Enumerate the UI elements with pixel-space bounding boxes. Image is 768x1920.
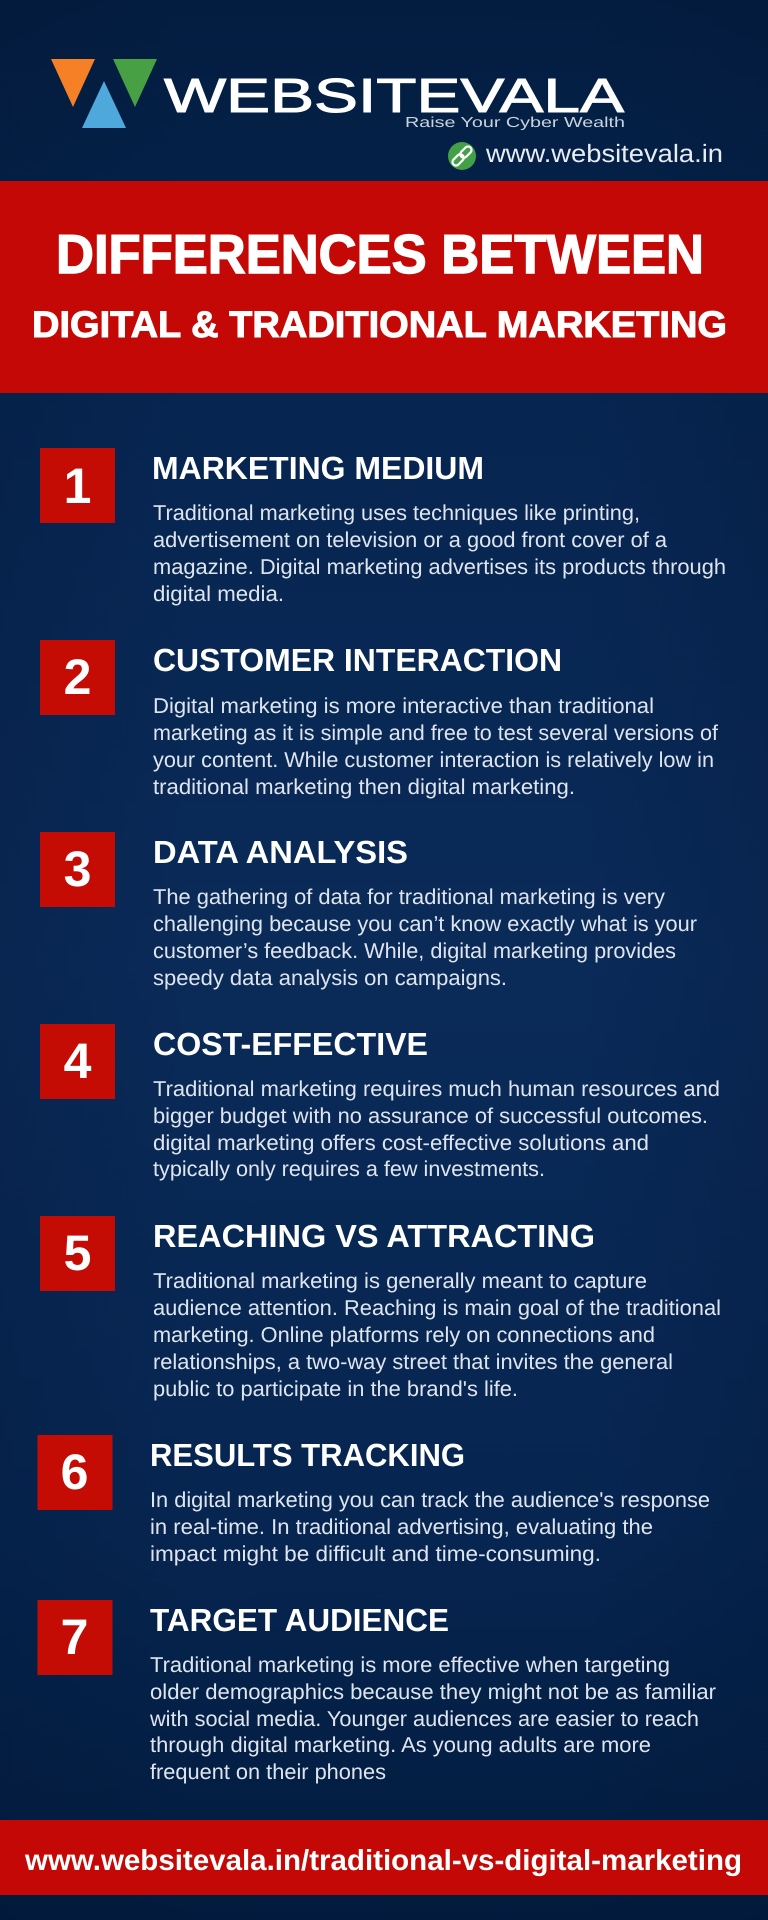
logo wordmark: WEBSITEVALA — [164, 70, 624, 123]
heading 4: COST-EFFECTIVE — [153, 1026, 428, 1062]
body text 7: with social media. Younger audiences are easier to reach — [149, 1707, 699, 1731]
number badge 7 — [38, 1600, 112, 1675]
body text 4: digital marketing offers cost-effective solutions and — [153, 1131, 649, 1155]
number badge 4 — [40, 1024, 115, 1099]
footer banner — [0, 1820, 768, 1895]
body text 6: in real-time. In traditional advertising, evaluating the — [150, 1515, 653, 1539]
website link — [448, 140, 723, 170]
panel: item 4 cost-effective — [40, 1024, 720, 1181]
body text 5: relationships, a two-way street that invites the general — [153, 1350, 673, 1374]
body text 1 — [153, 501, 726, 606]
number badge 4: 4 — [64, 1033, 92, 1089]
body text 3 — [153, 885, 697, 990]
body text 7: through digital marketing. As young adults are more — [150, 1733, 651, 1757]
body text 2: traditional marketing then digital marketing. — [153, 775, 575, 799]
body text 3: customer’s feedback. While, digital marketing provides — [153, 939, 676, 963]
number badge 7: 7 — [61, 1609, 88, 1665]
title banner — [0, 181, 768, 393]
body text 7: Traditional marketing is more effective when targeting — [150, 1653, 670, 1677]
body text 5: public to participate in the brand's life. — [153, 1377, 518, 1401]
panel: item 5 reaching vs attracting — [40, 1216, 721, 1401]
panel: item 2 customer interaction — [40, 640, 718, 799]
heading 3: DATA ANALYSIS — [153, 834, 408, 870]
body text 5: marketing. Online platforms rely on connections and — [153, 1323, 655, 1347]
body text 3: The gathering of data for traditional marketing is very — [153, 885, 665, 909]
body text 1: Traditional marketing uses techniques like printing, — [153, 501, 640, 525]
logo tagline: Raise Your Cyber Wealth — [405, 115, 625, 131]
number badge 6 — [38, 1435, 112, 1510]
subtitle: DIGITAL & TRADITIONAL MARKETING — [32, 304, 727, 345]
number badge 1 — [40, 448, 115, 523]
title: DIFFERENCES BETWEEN — [56, 223, 704, 285]
body text 7: older demographics because they might not be as familiar — [150, 1680, 716, 1704]
icon: orange triangle — [51, 59, 95, 107]
number badge 2 — [40, 640, 115, 715]
body text 2: marketing as it is simple and free to test several versions of — [153, 721, 718, 745]
body text 6: In digital marketing you can track the audience's response — [150, 1488, 710, 1512]
footer url: www.websitevala.in/traditional-vs-digital-marketing — [24, 1845, 742, 1877]
body text 5: audience attention. Reaching is main goal of the traditional — [153, 1296, 721, 1320]
number badge 2: 2 — [64, 649, 91, 705]
heading 6: RESULTS TRACKING — [150, 1437, 465, 1473]
body text 7 — [149, 1653, 716, 1784]
website url: www.websitevala.in — [485, 140, 723, 168]
body text 7: frequent on their phones — [150, 1760, 386, 1784]
body text 3: speedy data analysis on campaigns. — [153, 966, 507, 990]
number badge 6: 6 — [61, 1444, 88, 1500]
number badge 1: 1 — [64, 458, 91, 514]
number badge 5 — [40, 1216, 115, 1291]
logo — [51, 59, 625, 131]
body text 6: impact might be difficult and time-consuming. — [150, 1542, 601, 1566]
body text 3: challenging because you can’t know exactly what is your — [153, 912, 697, 936]
body text 2 — [153, 694, 718, 799]
icon: green triangle — [113, 59, 157, 107]
body text 4 — [153, 1077, 720, 1181]
body text 2: Digital marketing is more interactive than traditional — [153, 694, 654, 718]
panel: item 7 target audience — [38, 1600, 716, 1784]
panel: item 3 data analysis — [40, 832, 697, 990]
panel: item 6 results tracking — [38, 1435, 710, 1566]
heading 1: MARKETING MEDIUM — [152, 450, 484, 486]
body text 6 — [150, 1488, 710, 1566]
heading 7: TARGET AUDIENCE — [150, 1602, 449, 1638]
body text 1: magazine. Digital marketing advertises its products through — [153, 555, 726, 579]
body text 1: digital media. — [153, 582, 284, 606]
icon: blue triangle — [82, 81, 126, 128]
number badge 3 — [40, 832, 115, 907]
heading 2: CUSTOMER INTERACTION — [153, 642, 562, 678]
heading 5: REACHING VS ATTRACTING — [153, 1218, 595, 1254]
icon: link — [448, 142, 476, 170]
panel: item 1 marketing medium — [40, 448, 726, 606]
body text 4: Traditional marketing requires much human resources and — [153, 1077, 720, 1101]
body text 4: typically only requires a few investments. — [153, 1157, 545, 1181]
number badge 3: 3 — [64, 841, 91, 897]
body text 4: bigger budget with no assurance of successful outcomes. — [153, 1104, 708, 1128]
number badge 5: 5 — [64, 1225, 91, 1281]
body text 5: Traditional marketing is generally meant to capture — [153, 1269, 647, 1293]
body text 5 — [153, 1269, 721, 1401]
body text 2: your content. While customer interaction is relatively low in — [153, 748, 714, 772]
body text 1: advertisement on television or a good front cover of a — [153, 528, 667, 552]
